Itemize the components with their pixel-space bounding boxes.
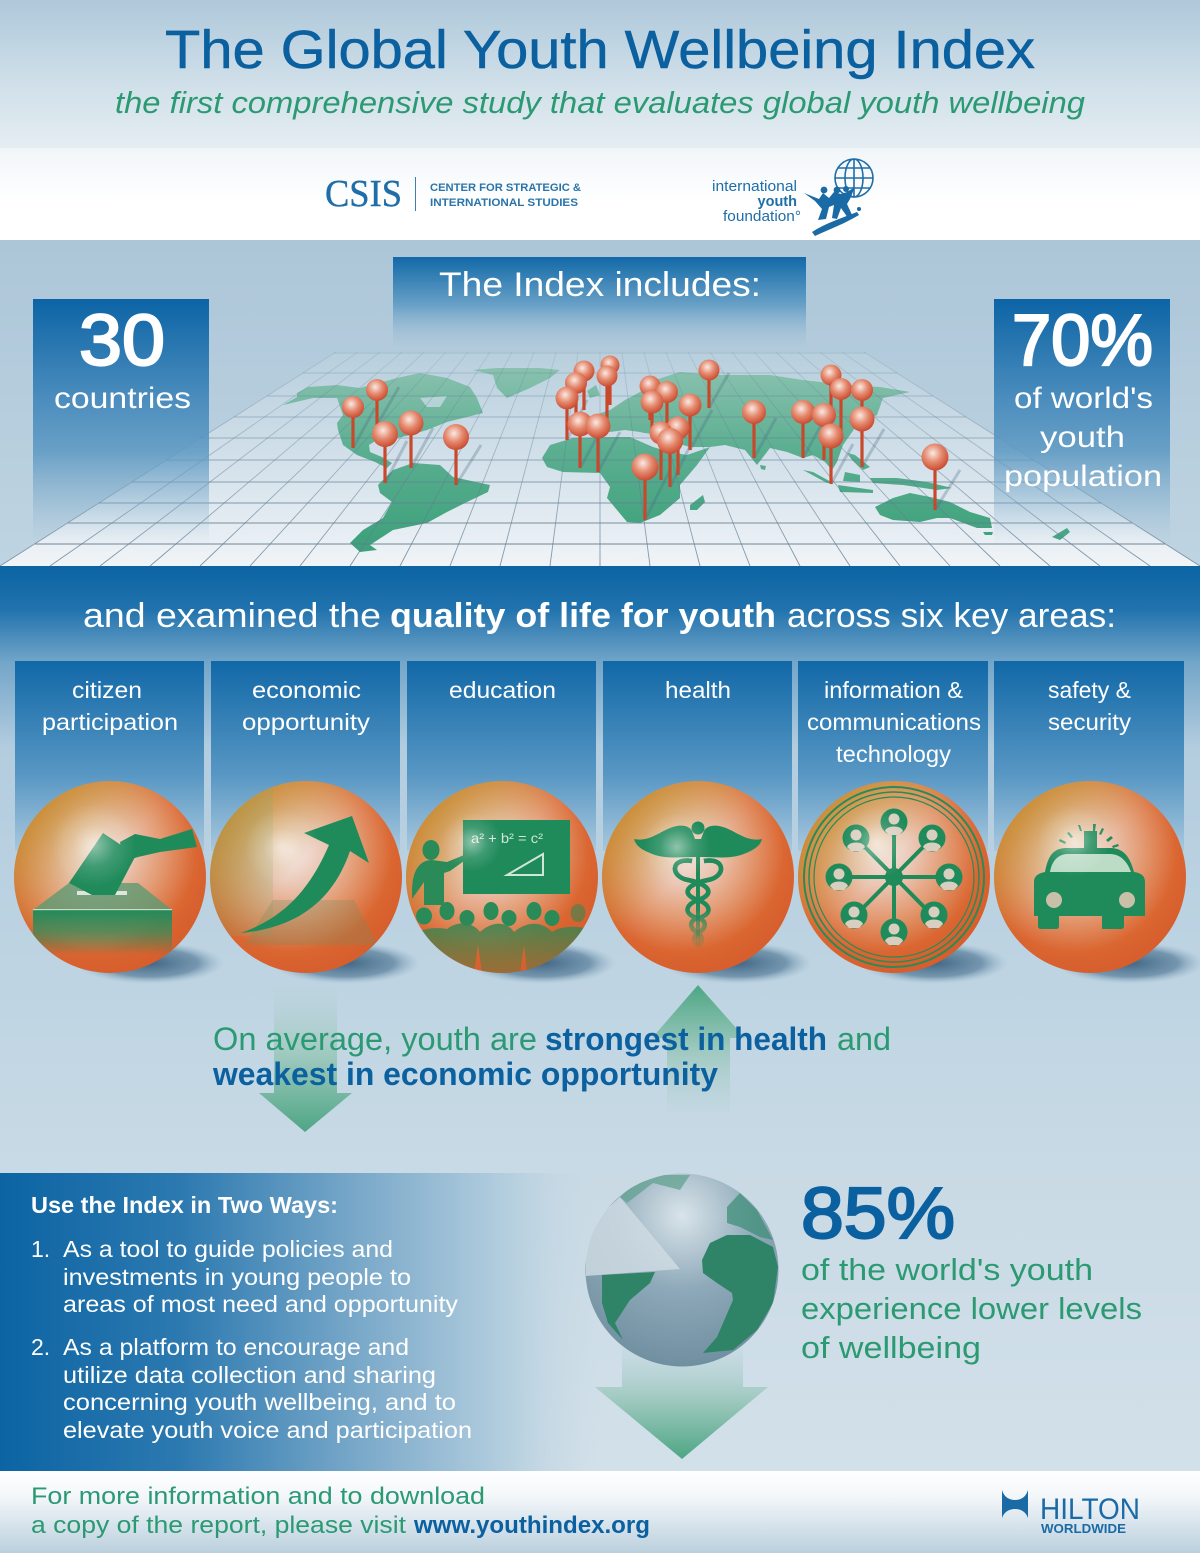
column: safety and security: safety & xyxy=(1048,677,1131,703)
background: header area xyxy=(0,0,1200,150)
background: map area xyxy=(0,240,1200,566)
stat box: 30 countries xyxy=(33,299,209,544)
stat: 85 percent: of wellbeing xyxy=(801,1330,981,1365)
panel: use the index in two ways: investments in young people to xyxy=(63,1264,411,1290)
column: information and communications technology: technology xyxy=(836,741,952,767)
subtitle: the first comprehensive study that evaluates global youth wellbeing xyxy=(115,85,1085,120)
callout: strongest and weakest: and xyxy=(837,1021,891,1057)
icon: rising arrow sphere xyxy=(210,781,420,984)
stat: 85 percent: experience lower levels xyxy=(801,1291,1142,1326)
column: citizen participation: participation xyxy=(42,709,178,735)
stat: 85 percent: 85% xyxy=(801,1174,955,1254)
column: health xyxy=(603,661,792,851)
logo: Hilton Worldwide: HILTON xyxy=(1040,1493,1140,1526)
arrow: strongest, up xyxy=(652,985,745,1112)
callout: strongest and weakest: strongest in health xyxy=(545,1021,827,1057)
lakes and inland seas xyxy=(420,396,668,437)
grid lines xyxy=(0,352,1200,566)
column: information and communications technology xyxy=(798,661,988,851)
arrow: weakest, down xyxy=(259,985,352,1132)
column: safety and security: security xyxy=(1048,709,1132,735)
background: six areas xyxy=(0,566,1200,1173)
section heading: six key areas: and examined the xyxy=(83,597,381,635)
logo: International Youth Foundation: foundation° xyxy=(723,209,801,225)
icon: network sphere xyxy=(798,781,1008,984)
section heading: six key areas xyxy=(83,597,1116,635)
header box: The Index includes: The Index includes: xyxy=(439,266,761,304)
logo: Hilton Worldwide xyxy=(1002,1490,1140,1536)
icon: classroom sphere: a² + b² = c² xyxy=(471,830,543,846)
continents xyxy=(283,368,1070,552)
panel: use the index in two ways: Use the Index in Two Ways: xyxy=(31,1192,338,1218)
panel: use the index in two ways: As a platform to encourage and xyxy=(63,1334,409,1360)
column: health: health xyxy=(665,677,731,703)
stat box: 70% of world's youth population xyxy=(994,299,1170,544)
panel: use the index in two ways: utilize data collection and sharing xyxy=(63,1362,436,1388)
footer text: a copy of the report, please visit xyxy=(31,1512,406,1539)
logo: CSIS: CENTER FOR STRATEGIC & xyxy=(430,182,581,194)
stat box: 70% of world's youth population: 70% xyxy=(1012,301,1153,381)
header box: The Index includes xyxy=(393,257,806,347)
column: information and communications technology: information & xyxy=(824,677,963,703)
icon: ballot sphere xyxy=(14,781,224,984)
footer band xyxy=(0,1471,1200,1553)
panel: use the index in two ways: concerning youth wellbeing, and to xyxy=(63,1389,456,1415)
section heading: six key areas: quality of life for youth xyxy=(390,597,776,635)
panel: use the index in two ways: 1. xyxy=(31,1236,50,1262)
column: citizen participation: citizen xyxy=(72,677,142,703)
stat box: 30 countries: countries xyxy=(54,382,191,415)
footer text xyxy=(31,1483,650,1539)
map: perspective grid with world xyxy=(0,352,1200,566)
stat box: 70% of world's youth population: youth xyxy=(1040,421,1125,454)
logo: CSIS xyxy=(325,173,581,215)
stat box: 30 countries: 30 xyxy=(79,301,165,381)
stat: 85 percent: of the world's youth xyxy=(801,1252,1093,1287)
logo: International Youth Foundation: youth xyxy=(758,194,797,210)
column: safety and security xyxy=(994,661,1184,851)
panel: use the index in two ways: As a tool to guide policies and xyxy=(63,1236,393,1262)
logo: CSIS: CSIS xyxy=(325,173,402,215)
footer text: For more information and to download xyxy=(31,1483,485,1510)
footer text: www.youthindex.org xyxy=(413,1512,650,1539)
stat: 85 percent xyxy=(801,1174,1142,1365)
map pins xyxy=(342,356,960,520)
stat box: 70% of world's youth population: population xyxy=(1004,460,1162,493)
column: education xyxy=(407,661,596,851)
panel: use the index in two ways: 2. xyxy=(31,1334,50,1360)
callout: strongest and weakest: On average, youth are xyxy=(213,1021,537,1057)
map surface xyxy=(0,352,1200,566)
logo: International Youth Foundation: international xyxy=(712,179,797,195)
logo: CSIS: INTERNATIONAL STUDIES xyxy=(430,197,578,209)
panel: use the index in two ways: elevate youth voice and participation xyxy=(63,1417,472,1443)
column: economic opportunity xyxy=(211,661,400,851)
stat box: 70% of world's youth population: of world's xyxy=(1014,382,1153,415)
column: education: education xyxy=(449,677,556,703)
icon: caduceus sphere xyxy=(602,781,812,984)
section heading: six key areas: across six key areas: xyxy=(787,597,1116,635)
column: economic opportunity: opportunity xyxy=(242,709,371,735)
icon: globe with pie slice xyxy=(586,1174,778,1366)
icon: police car sphere xyxy=(994,781,1200,984)
logo: International Youth Foundation xyxy=(712,159,873,236)
callout: strongest and weakest: weakest in economic opportunity xyxy=(212,1056,718,1092)
icon: classroom sphere xyxy=(406,781,616,984)
column: citizen participation xyxy=(15,661,204,851)
panel: use the index in two ways xyxy=(0,1173,600,1471)
column: information and communications technology: communications xyxy=(807,709,981,735)
arrow: 85 percent down xyxy=(595,1345,768,1459)
panel: use the index in two ways: areas of most need and opportunity xyxy=(63,1291,459,1317)
callout: strongest and weakest xyxy=(212,1021,891,1092)
logo band xyxy=(0,148,1200,240)
column: economic opportunity: economic xyxy=(252,677,361,703)
title: The Global Youth Wellbeing Index xyxy=(165,20,1035,80)
logo: Hilton Worldwide: WORLDWIDE xyxy=(1041,1521,1126,1536)
background: lower section xyxy=(0,1173,1200,1471)
